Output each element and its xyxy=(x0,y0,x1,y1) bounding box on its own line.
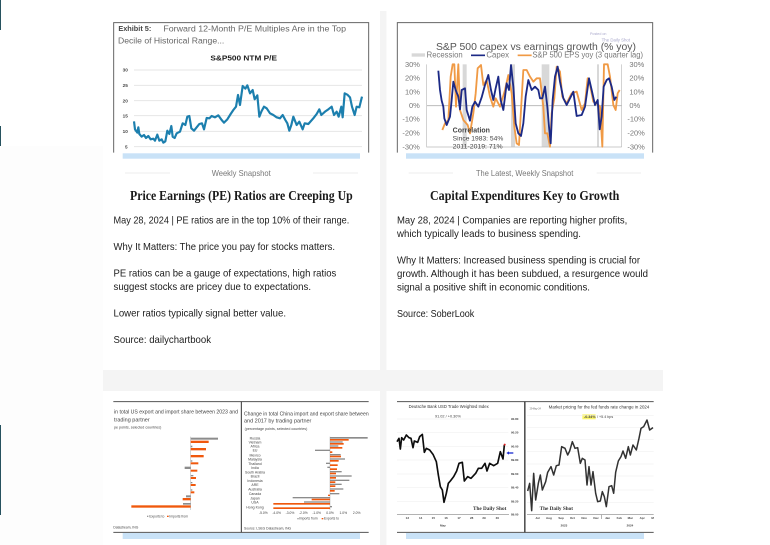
heading: Price Earnings (PE) Ratios are Creeping Up xyxy=(130,188,353,203)
chart: fed funds rate pricing: Jan xyxy=(605,516,610,520)
chart: Deutsche Bank USD index: 89.60 xyxy=(511,472,519,476)
vertical gutter xyxy=(380,11,386,545)
body text: Lower ratios typically signal better value. xyxy=(114,308,286,320)
chart: China trade share: (percentage points, selected countries) xyxy=(245,427,307,431)
chart: capex vs earnings growth: 10% xyxy=(629,87,645,96)
chart: US trade share: Datastream, ING xyxy=(113,526,139,530)
chart: Deutsche Bank USD index: 29 xyxy=(482,516,486,520)
chart: Deutsche Bank USD index: 90.00 xyxy=(511,444,519,448)
chart: capex vs earnings growth: 20% xyxy=(405,74,420,83)
chart: S&P500 NTM P/E: Decile of Historical Range... xyxy=(118,37,224,46)
chart: fed funds rate pricing: Jul xyxy=(535,516,540,520)
chart: capex vs earnings growth: -10% xyxy=(627,115,645,124)
chart: capex vs earnings growth: -20% xyxy=(627,129,645,138)
body text: May 28, 2024 | Companies are reporting higher profits, xyxy=(397,214,627,226)
chart: capex vs earnings growth: -20% xyxy=(402,129,420,138)
category label: Weekly Snapshot xyxy=(212,168,271,178)
horizontal gutter xyxy=(103,370,663,391)
chart: capex vs earnings growth: -30% xyxy=(627,142,645,151)
chart: China trade share: Exports to xyxy=(324,517,339,521)
chart: US trade share: pe points, selected countries) xyxy=(114,425,161,429)
chart: China trade share: EU xyxy=(253,449,258,453)
chart: US trade share: in total US export and import share between 2023 and xyxy=(114,410,238,416)
chart: fed funds rate pricing: 2023 xyxy=(561,523,568,527)
chart: fed funds rate pricing: Apr xyxy=(640,516,646,520)
chart: capex vs earnings growth: 0% xyxy=(409,101,420,110)
chart: dollar index and fed funds xyxy=(397,402,654,532)
chart: capex vs earnings growth: Recession xyxy=(427,51,463,60)
chart: China trade share: -4.0% xyxy=(272,511,281,515)
chart: Deutsche Bank USD index xyxy=(397,404,519,527)
chart: China trade share: 2.0% xyxy=(353,511,360,515)
chart: China trade share: Australia xyxy=(248,488,262,492)
chart: Deutsche Bank USD index: 13 xyxy=(406,516,409,520)
chart: fed funds rate pricing xyxy=(527,404,654,527)
chart: Deutsche Bank USD index: 17 xyxy=(457,516,461,520)
body text: which typically leads to business spending. xyxy=(396,228,581,240)
body text: PE ratios can be a gauge of expectations, high ratios xyxy=(114,268,336,280)
chart: China trade share: -2.0% xyxy=(299,511,308,515)
panel: USD index and fed pricing charts xyxy=(397,402,654,539)
chart: China trade share xyxy=(244,411,369,530)
chart: S&P500 NTM P/E: 15 xyxy=(123,113,128,118)
chart: fed funds rate pricing: Oct xyxy=(570,516,575,520)
panel: trade share charts xyxy=(113,402,369,539)
chart: fed funds rate pricing: Dec xyxy=(593,516,599,520)
chart: fed funds rate pricing: Market pricing for the fed funds rate change in 2024 xyxy=(549,404,650,409)
chart: S&P500 NTM P/E: 5 xyxy=(125,144,128,149)
panel: capital expenditures xyxy=(396,23,653,320)
chart: fed funds rate pricing: / +5.4 bps xyxy=(597,415,613,419)
chart: US trade share: Exports to xyxy=(149,514,164,518)
chart: capex vs earnings growth: Since 1983: 54% xyxy=(453,136,503,143)
chart: Deutsche Bank USD index: 15 xyxy=(432,516,435,520)
chart: China trade share: -1.0% xyxy=(312,511,321,515)
chart: China trade share: South Arabia xyxy=(245,470,265,474)
category label: The Latest, Weekly Snapshot xyxy=(476,168,574,178)
chart: fed funds rate pricing: 2024 xyxy=(627,523,634,527)
chart: Deutsche Bank USD index: 90.80 xyxy=(511,417,519,421)
heading: Capital Expenditures Key to Growth xyxy=(430,188,620,203)
chart: S&P500 NTM P/E: Forward 12-Month P/E Multiples Are in the Top xyxy=(163,24,347,33)
chart: Deutsche Bank USD index: 28 xyxy=(470,516,474,520)
body text: signal a positive shift in economic conditions. xyxy=(397,282,590,294)
chart: China trade share: Change in total China import and export share between xyxy=(244,411,369,417)
chart: US trade share xyxy=(113,410,238,530)
chart: capex vs earnings growth: 30% xyxy=(405,60,420,69)
chart: Deutsche Bank USD index: 14 xyxy=(419,516,423,520)
body text: Source: dailychartbook xyxy=(114,334,212,346)
chart: China trade share: Indonesia xyxy=(247,479,263,483)
chart: US trade share: Imports from xyxy=(169,514,188,518)
chart: capex vs earnings growth: Correlation xyxy=(453,128,490,135)
body text xyxy=(396,214,648,320)
left edge accent bars xyxy=(0,0,1,515)
chart: China trade share: India xyxy=(251,466,259,470)
chart: S&P500 NTM P/E: Exhibit 5: xyxy=(118,24,151,33)
chart: S&P500 NTM P/E: 25 xyxy=(123,83,128,88)
body text: Source: SoberLook xyxy=(397,308,475,320)
chart: China trade share: -5.0% xyxy=(259,511,268,515)
chart: Deutsche Bank USD index: 90.20 xyxy=(511,431,519,435)
chart: capex vs earnings growth: S&P 500 capex vs earnings growth (% yoy) xyxy=(436,42,636,53)
chart: capex vs earnings growth: S&P 500 EPS yoy (3 quarter lag) xyxy=(532,51,643,60)
chart: China trade share: 1.0% xyxy=(340,511,347,515)
chart: China trade share: Vietnam xyxy=(249,441,261,445)
chart: capex vs earnings growth: 0% xyxy=(629,101,640,110)
chart: capex vs earnings growth: -30% xyxy=(402,142,420,151)
body text: Why It Matters: The price you pay for stocks matters. xyxy=(114,241,335,253)
chart: fed funds rate pricing: M xyxy=(651,516,654,520)
chart: Deutsche Bank USD index: 16 xyxy=(444,516,448,520)
chart: Deutsche Bank USD index: 89.20 xyxy=(511,499,519,503)
chart: China trade share: and 2017 by trading partner xyxy=(244,418,312,424)
caption bar xyxy=(406,153,644,159)
chart: China trade share: Mexico xyxy=(249,453,261,457)
chart: fed funds rate pricing: Mar xyxy=(628,516,634,520)
chart: China trade share: Canada xyxy=(249,492,261,496)
chart: China trade share: Malaysia xyxy=(248,458,262,462)
chart: Deutsche Bank USD index: 89.00 xyxy=(511,513,519,517)
chart: fed funds rate pricing: 29-May-24 xyxy=(530,408,541,410)
chart: S&P500 NTM P/E: S&P500 NTM P/E xyxy=(210,54,277,63)
chart: China trade share: Imports from xyxy=(299,517,318,521)
page background xyxy=(0,146,103,545)
chart: Deutsche Bank USD index: 89.40 xyxy=(511,486,519,490)
chart: capex vs earnings growth: 10% xyxy=(405,87,420,96)
chart: China trade share: Hong Kong xyxy=(246,506,264,510)
chart: fed funds rate pricing: Nov xyxy=(581,516,587,520)
caption bar xyxy=(406,533,644,539)
chart: US trade share: trading partner xyxy=(114,417,150,423)
chart: capex vs earnings growth: 2011-2019: 71% xyxy=(453,143,503,150)
chart: capex vs earnings growth: 20% xyxy=(629,74,645,83)
chart: China trade share: Japan xyxy=(250,496,260,500)
chart: Deutsche Bank USD index: 91.02 / +0.30% xyxy=(435,415,461,419)
chart: fed funds rate pricing: Feb xyxy=(617,516,622,520)
caption bar xyxy=(123,153,360,159)
chart: China trade share: Russia xyxy=(250,436,260,440)
chart: capex vs earnings growth: The Daily Shot xyxy=(602,37,631,42)
chart: Deutsche Bank USD index: Deutsche Bank USD Trade Weighted Index xyxy=(409,404,489,409)
chart: S&P500 NTM P/E xyxy=(114,23,369,153)
chart: S&P500 NTM P/E: 10 xyxy=(123,129,128,134)
chart: Deutsche Bank USD index: The Daily Shot xyxy=(473,506,507,512)
chart: US and China trade share xyxy=(113,402,369,532)
chart: China trade share: ARE xyxy=(251,483,259,487)
chart: capex vs earnings growth: Capex xyxy=(486,51,509,60)
chart: China trade share: USA xyxy=(251,501,259,505)
chart: S&P500 NTM P/E: 30 xyxy=(123,68,128,73)
body text: growth. Although it has been subdued, a resurgence would xyxy=(397,268,648,280)
chart: fed funds rate pricing: -0.34% xyxy=(584,415,596,419)
chart: China trade share: Africa xyxy=(251,445,260,449)
chart: China trade share: 0.0% xyxy=(326,511,334,515)
chart: capex vs earnings growth: -10% xyxy=(402,115,420,124)
chart: China trade share: -3.0% xyxy=(286,511,294,515)
body text: May 28, 2024 | PE ratios are in the top 10% of their range. xyxy=(114,214,349,226)
chart: Deutsche Bank USD index: 89.80 xyxy=(511,458,519,462)
chart: fed funds rate pricing: The Daily Shot xyxy=(540,506,573,512)
chart: China trade share: Brazil xyxy=(251,475,260,479)
body text xyxy=(114,214,349,346)
chart: fed funds rate pricing: Sep xyxy=(558,516,564,520)
chart: China trade share: Thailand xyxy=(248,462,262,466)
chart: Deutsche Bank USD index: May xyxy=(440,523,446,527)
chart: capex vs earnings growth xyxy=(397,23,653,153)
panel: PE ratios xyxy=(114,23,369,346)
chart: fed funds rate pricing: Aug xyxy=(546,516,552,520)
chart: capex vs earnings growth: 30% xyxy=(629,60,645,69)
chart: Deutsche Bank USD index: 30 xyxy=(496,516,499,520)
chart: capex vs earnings growth: Posted on xyxy=(590,32,606,36)
chart: China trade share: Source: LSEG Datastream, ING xyxy=(244,526,292,530)
body text: suggest stocks are pricey due to expectations. xyxy=(114,281,311,293)
chart: S&P500 NTM P/E: 20 xyxy=(123,98,128,103)
caption bar xyxy=(123,533,360,539)
body text: Why It Matters: Increased business spending is crucial for xyxy=(397,254,640,266)
